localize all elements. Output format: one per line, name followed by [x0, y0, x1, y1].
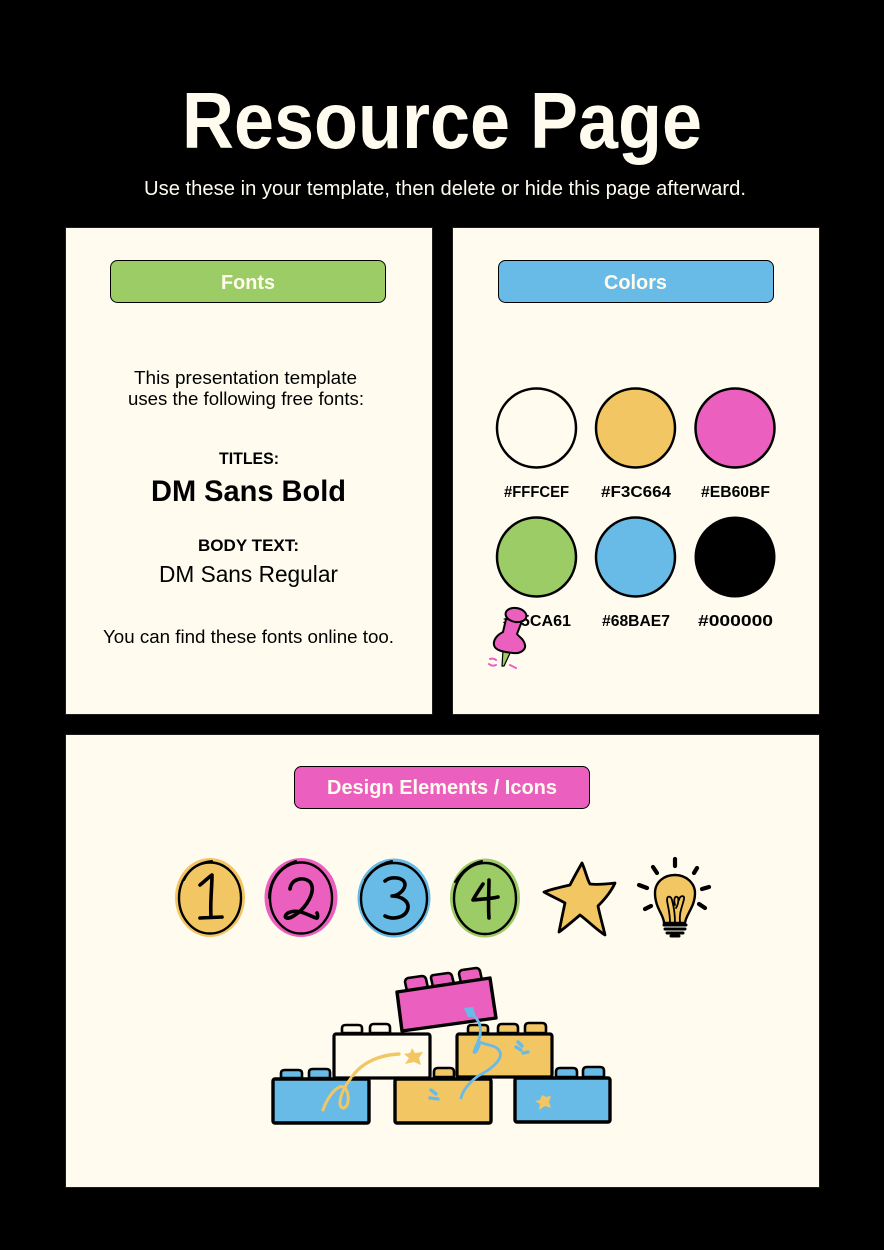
body font name: DM Sans Regular — [159, 561, 338, 587]
brick: bottom centre yellow — [395, 1068, 491, 1123]
titles label: TITLES: — [219, 450, 279, 468]
colors heading — [498, 260, 774, 302]
swatch: pink: #EB60BF — [701, 484, 770, 501]
swatch: cream: #FFFCEF — [504, 484, 569, 501]
panel: colors — [452, 228, 820, 714]
panel: design elements and icons — [66, 734, 820, 1188]
swatch: pink — [696, 388, 774, 501]
swatch: cream — [497, 388, 576, 501]
brick: middle yellow — [457, 1023, 552, 1077]
panel: fonts — [66, 228, 432, 714]
icon: push pin — [489, 606, 528, 668]
icon: number 3 — [358, 858, 430, 938]
brick: top pink — [397, 968, 496, 1031]
swatch: yellow — [596, 388, 675, 501]
swatch: black: #000000 — [698, 613, 773, 630]
icon: light bulb — [639, 859, 709, 936]
swatch: black — [694, 516, 776, 630]
fonts note: You can find these fonts online too. — [103, 627, 394, 647]
swatch: green: #95CA61 — [503, 613, 571, 630]
icon: number 2 — [264, 858, 338, 937]
swatch: yellow: #F3C664 — [601, 484, 671, 501]
icon: number 4 — [450, 858, 520, 938]
squiggle: blue arrow across bricks — [461, 1007, 500, 1098]
design elements heading: Design Elements / Icons — [327, 777, 557, 799]
fonts heading — [110, 260, 386, 302]
brick: bottom left blue — [273, 1069, 369, 1123]
fonts intro text: This presentation template — [134, 368, 357, 388]
brick: middle white — [334, 1024, 430, 1078]
titles font name: DM Sans Bold — [151, 475, 346, 508]
fonts intro text — [128, 368, 364, 409]
icon: number 1 — [175, 858, 245, 937]
swatch: blue: #68BAE7 — [602, 613, 670, 630]
swatch: green — [497, 518, 576, 630]
fonts intro text: uses the following free fonts: — [128, 389, 364, 409]
icon: star — [544, 863, 615, 935]
title: Resource Page — [182, 76, 702, 165]
design elements heading — [294, 766, 590, 808]
fonts heading: Fonts — [221, 272, 275, 294]
brick: bottom right blue — [515, 1067, 610, 1122]
subtitle: Use these in your template, then delete or hide this page afterward. — [144, 178, 746, 200]
illustration: brick pyramid — [273, 968, 610, 1123]
colors heading: Colors — [604, 272, 667, 294]
body text label: BODY TEXT: — [198, 537, 299, 555]
swatch: blue — [596, 518, 675, 630]
